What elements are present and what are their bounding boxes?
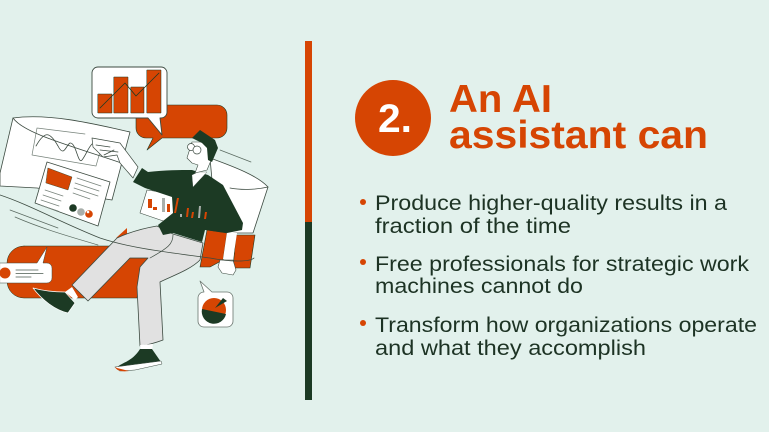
- bullet list: [360, 192, 757, 360]
- bullet 1: fraction of the time: [375, 215, 571, 238]
- illustration: man with floating data panels: [0, 67, 268, 371]
- bullet 3: Transform how organizations operate: [375, 314, 757, 337]
- arc over folder: [0, 195, 254, 261]
- bullet 2: Free professionals for strategic work: [375, 253, 750, 276]
- thin motion lines: [10, 150, 251, 245]
- number badge: 2.: [378, 97, 412, 141]
- bullet 1: [360, 192, 727, 238]
- right data panel: [210, 158, 268, 233]
- orange folder: [200, 230, 255, 268]
- foot and shoe: left: [33, 287, 78, 313]
- chart speech bubble: [92, 67, 167, 135]
- heading: assistant can: [449, 114, 708, 157]
- panel arc: [13, 118, 133, 167]
- head with face: [187, 130, 218, 173]
- trousers: [72, 226, 203, 346]
- white cuff and hand: [218, 232, 237, 275]
- bullet 2: machines cannot do: [375, 275, 583, 298]
- dark sweater: [133, 168, 243, 242]
- report card: [35, 162, 110, 226]
- bullet 3: and what they accomplish: [375, 337, 646, 360]
- orange lower banner: [7, 246, 149, 298]
- heading: An AI: [449, 78, 552, 121]
- heading: [449, 78, 708, 157]
- orange speech bubble: [136, 105, 227, 150]
- pie chart bubble: [198, 281, 233, 327]
- pointing arm and hand: [92, 138, 138, 178]
- small bar chart card: [140, 190, 180, 225]
- bullet 2: [360, 253, 750, 298]
- vertical divider: [305, 41, 312, 400]
- bullet 1: Produce higher-quality results in a: [375, 192, 727, 215]
- bullet 3: [360, 314, 757, 360]
- back data panel: [0, 117, 130, 200]
- foot and shoe: right: [115, 344, 162, 371]
- number badge: [355, 80, 431, 156]
- shirt collar: [192, 172, 207, 187]
- line chart card: [32, 128, 102, 166]
- message bubble: [0, 247, 52, 283]
- sweater bar details: [174, 198, 207, 219]
